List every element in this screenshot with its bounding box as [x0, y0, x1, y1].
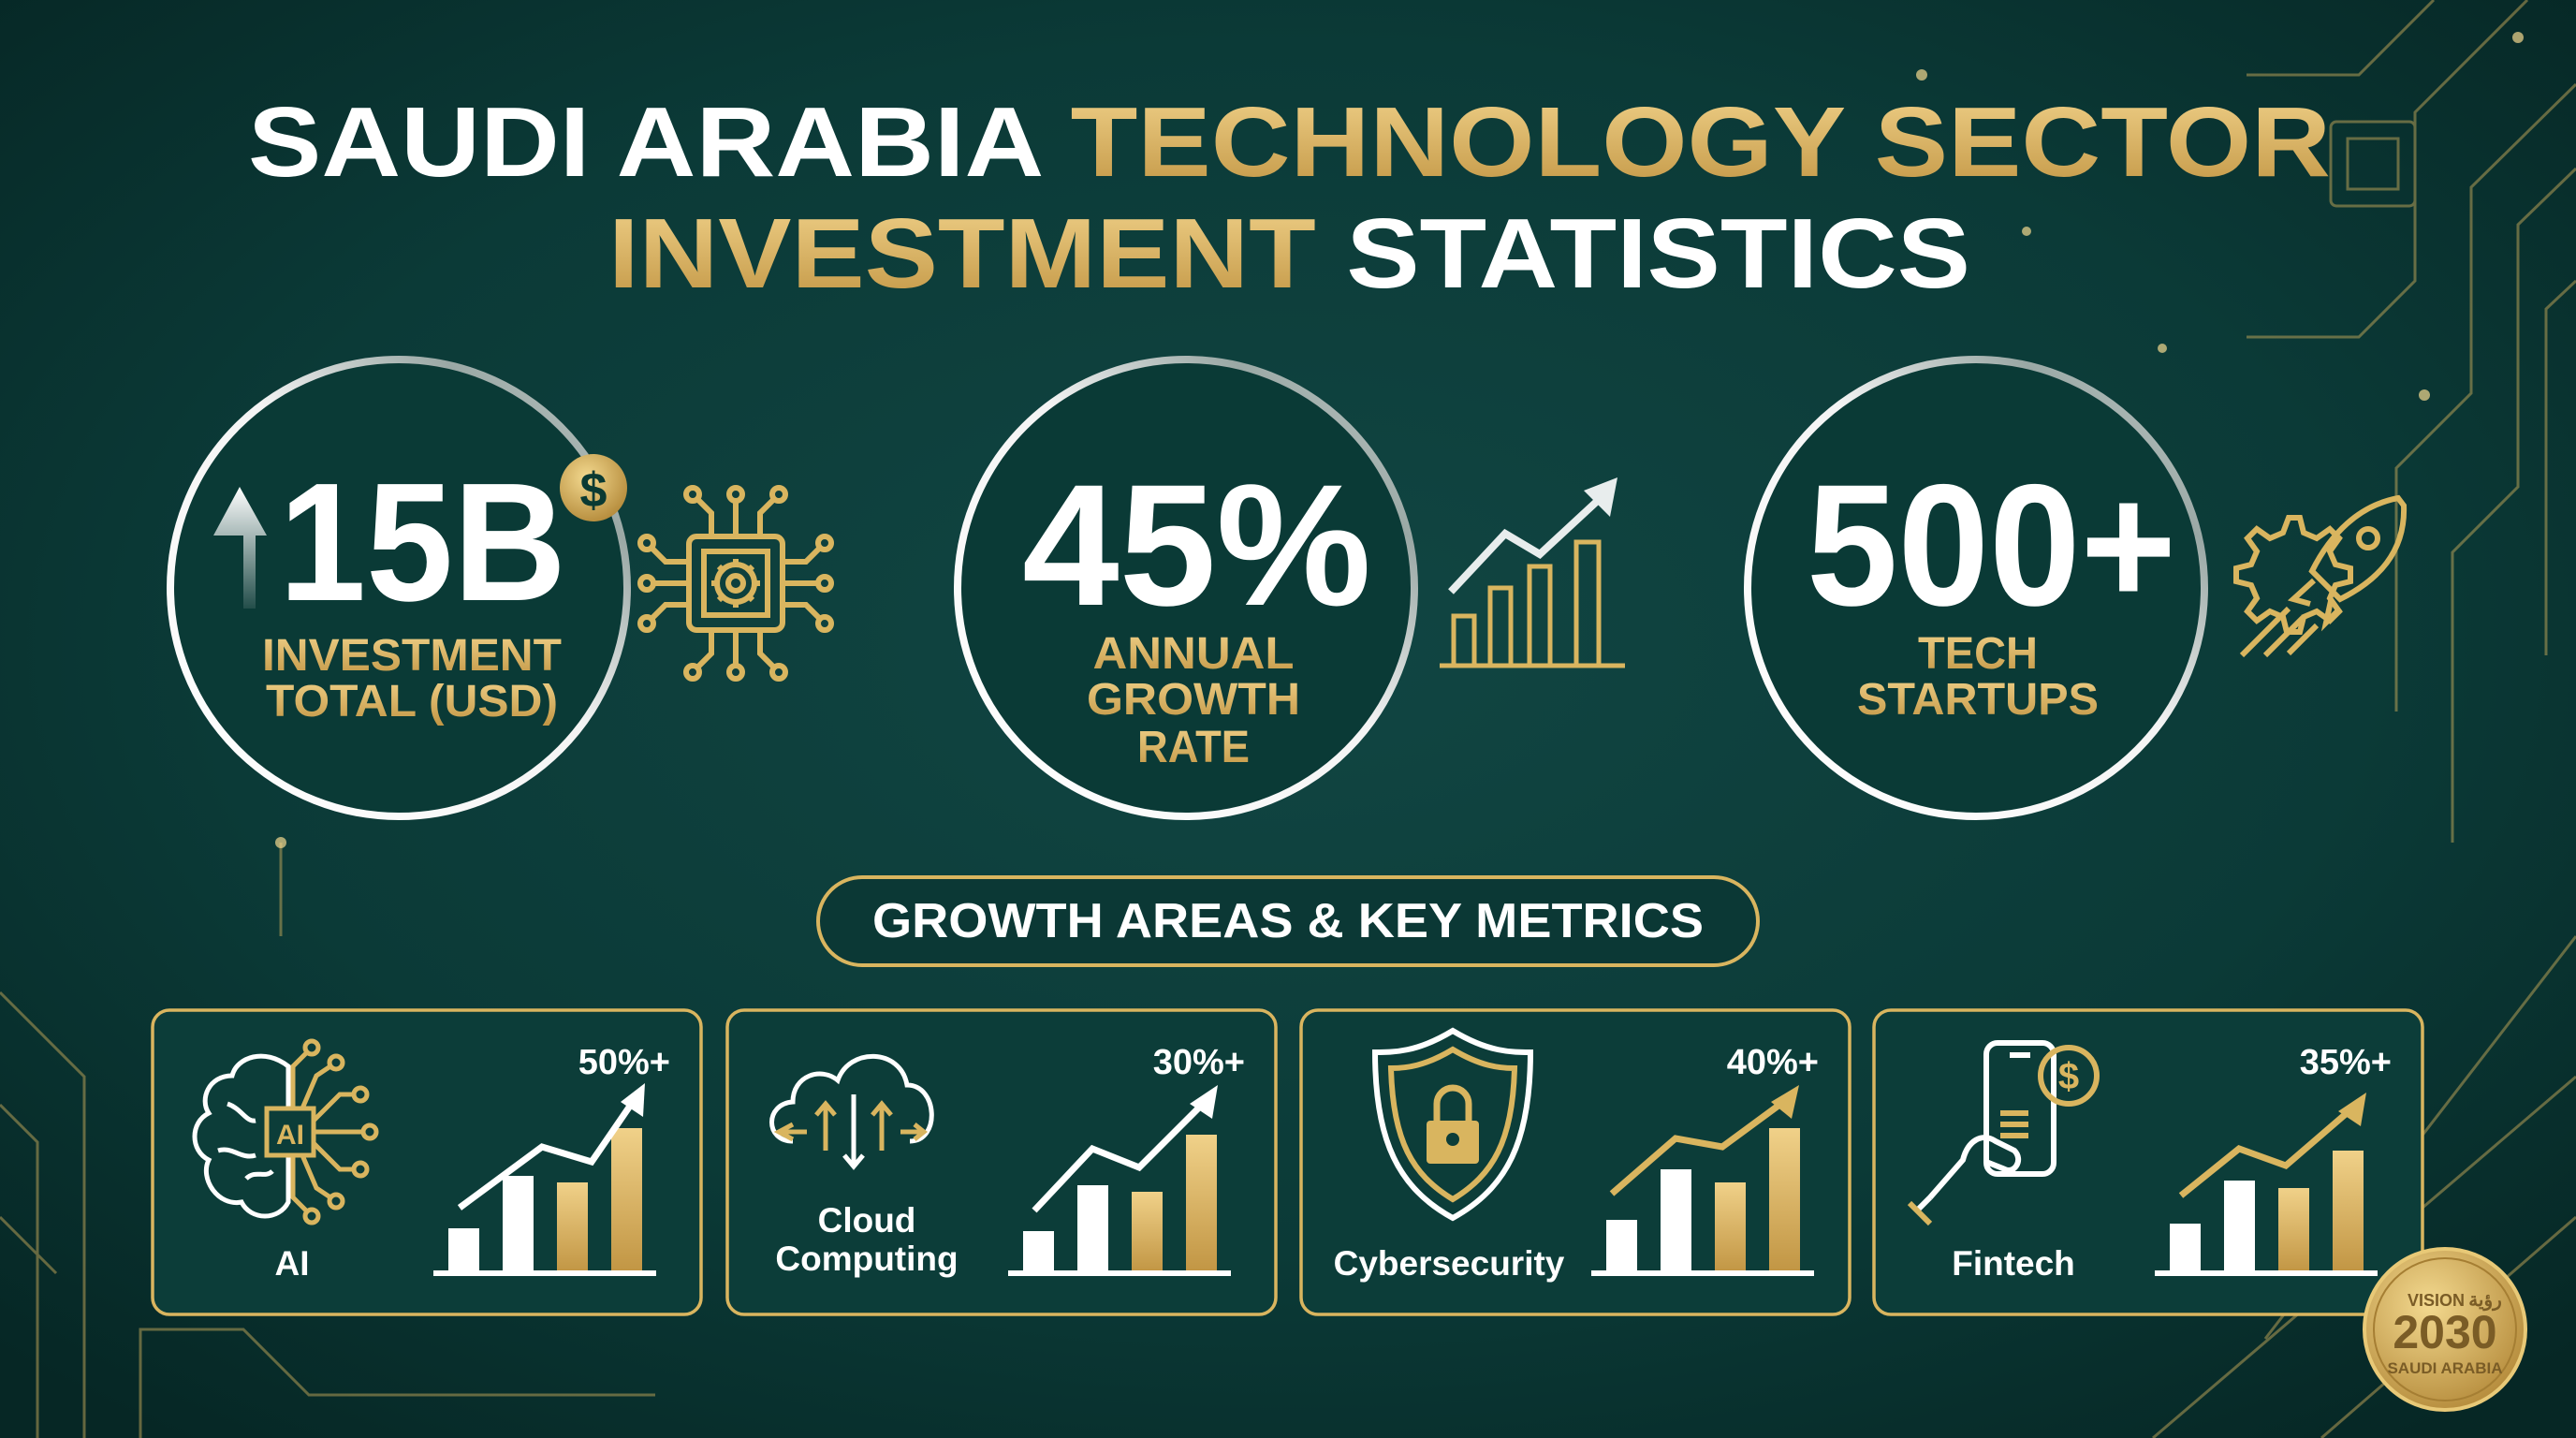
badge: vision 2030: SAUDI ARABIA	[2387, 1359, 2503, 1377]
icon: up arrow	[213, 487, 267, 609]
stat: annual growth rate	[958, 360, 1414, 816]
icon: growth bar chart	[1440, 477, 1625, 666]
title: SAUDI ARABIA TECHNOLOGY SECTOR	[248, 87, 2331, 198]
title	[248, 87, 2331, 309]
banner: growth areas: GROWTH AREAS & KEY METRICS	[872, 894, 1704, 948]
stat: tech startups: TECH	[1918, 629, 2038, 679]
icon: chip with gear	[640, 488, 831, 679]
chart: fintech growth: 35%+	[2300, 1043, 2392, 1082]
badge: vision 2030	[2364, 1249, 2525, 1410]
card: Cloud Computing: Cloud	[818, 1201, 915, 1240]
card: Cloud Computing	[727, 1010, 1276, 1314]
stat: investment total	[170, 360, 627, 816]
stat: annual growth rate: RATE	[1137, 723, 1250, 772]
divider line	[164, 919, 2415, 921]
stat: investment total: TOTAL (USD)	[266, 677, 558, 726]
card: Fintech	[1874, 1010, 2422, 1314]
card: Cybersecurity: Cybersecurity	[1334, 1244, 1565, 1283]
icon: cloud	[771, 1056, 931, 1167]
badge: vision 2030: VISION	[2408, 1291, 2465, 1310]
icon: phone hand coin: $	[2058, 1056, 2079, 1097]
card: Fintech: Fintech	[1952, 1244, 2075, 1283]
card: AI: AI	[276, 1120, 304, 1151]
icon: shield lock	[1375, 1031, 1530, 1218]
chart: cyber growth: 40%+	[1727, 1043, 1819, 1082]
icon: phone hand coin	[1910, 1043, 2097, 1224]
chart: cyber growth	[1591, 1043, 1819, 1273]
icon: rocket gear	[2236, 498, 2404, 655]
chart: AI growth: 50%+	[578, 1043, 670, 1082]
icon: dollar coin	[560, 454, 627, 521]
banner: growth areas	[818, 877, 1758, 965]
badge: vision 2030: رؤية	[2468, 1290, 2502, 1312]
icon: dollar coin: $	[580, 463, 607, 518]
stat: investment total: 15B	[279, 448, 566, 637]
stat: annual growth rate: GROWTH	[1087, 675, 1300, 725]
stat: tech startups	[1748, 360, 2204, 816]
chart: cloud growth	[1008, 1043, 1245, 1273]
card: Cloud Computing: Computing	[775, 1240, 959, 1278]
stat: tech startups: STARTUPS	[1857, 675, 2099, 725]
badge: vision 2030: 2030	[2393, 1306, 2497, 1358]
chart: fintech growth	[2155, 1043, 2392, 1273]
card: AI	[153, 1010, 701, 1314]
icon: AI brain	[195, 1041, 376, 1223]
stat: investment total: INVESTMENT	[262, 631, 562, 681]
card: Cybersecurity	[1301, 1010, 1850, 1314]
card: AI: AI	[275, 1244, 309, 1283]
stat: annual growth rate: ANNUAL	[1093, 629, 1294, 679]
stat: tech startups: 500+	[1807, 449, 2176, 642]
stat: annual growth rate: 45%	[1022, 449, 1371, 642]
title: INVESTMENT STATISTICS	[608, 198, 1970, 309]
chart: AI growth	[433, 1043, 670, 1273]
chart: cloud growth: 30%+	[1153, 1043, 1245, 1082]
